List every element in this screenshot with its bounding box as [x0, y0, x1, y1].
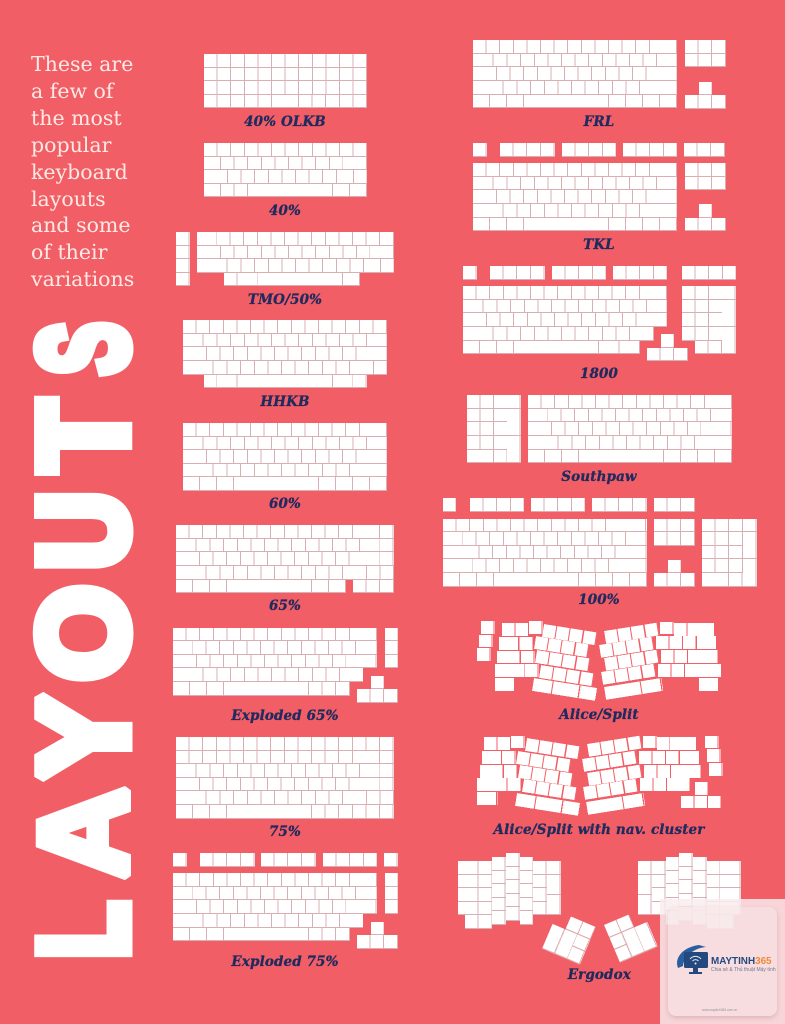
label: 40% OLKB: 40% OLKB [244, 114, 326, 130]
panel: Southpaw [467, 395, 732, 483]
keys: nav column [385, 873, 398, 914]
keys: right inner block [599, 622, 657, 702]
panel: 100% [443, 498, 756, 606]
keys: main block [173, 873, 377, 941]
title: LAYOUTS [30, 322, 138, 959]
keys: right inner block [582, 736, 640, 816]
logo tagline: Chia sẻ & Thủ thuật Máy tính [711, 967, 776, 973]
panel: Alice/Split with nav. cluster [477, 735, 722, 836]
intro text: layouts [31, 187, 106, 211]
label: Exploded 65%: Exploded 65% [231, 708, 339, 724]
intro text: and some [31, 213, 130, 237]
watermark overlay [660, 899, 785, 1024]
keys: numpad [702, 519, 757, 587]
keys: main block [463, 286, 667, 354]
label: Southpaw: Southpaw [561, 469, 637, 485]
intro text: keyboard [31, 160, 128, 184]
keys: arrow cluster [681, 782, 722, 809]
keys: function row [173, 853, 398, 867]
panel: Exploded 75% [173, 853, 398, 970]
keys: main block [173, 628, 377, 696]
intro text: variations [31, 267, 134, 291]
panel: 40% [204, 143, 367, 219]
panel: 40% OLKB [204, 54, 367, 130]
keys: HHKB [183, 320, 387, 388]
logo icon [675, 944, 709, 978]
label: FRL: FRL [584, 114, 614, 130]
label: Ergodox: Ergodox [568, 967, 631, 983]
keys: macro column [176, 232, 190, 286]
watermark card [668, 907, 777, 1016]
keys: arrow cluster [357, 676, 398, 703]
keys: left inner block [517, 738, 587, 813]
keys: numpad [467, 395, 521, 463]
keys: 40% [204, 143, 367, 197]
keys: arrow cluster [685, 82, 726, 109]
label: TKL: TKL [583, 237, 615, 253]
keys: left inner block [534, 624, 604, 699]
logo wordmark: MAYTINH365 [711, 956, 772, 967]
label: 1800: 1800 [580, 366, 618, 382]
logo url: www.maytinh365.com.vn [702, 1008, 737, 1012]
keys: main block [443, 519, 647, 587]
keys: 65% [176, 525, 394, 593]
keys: 75% [176, 737, 394, 819]
label: 65%: 65% [269, 598, 301, 614]
keys: main block [473, 163, 677, 231]
keys: right thumb cluster [604, 909, 658, 963]
label: TMO/50%: TMO/50% [248, 292, 322, 308]
intro text: These are [31, 52, 133, 76]
intro text: the most [31, 106, 122, 130]
panel: 65% [176, 525, 394, 614]
keys: nav cluster [685, 163, 726, 190]
keys: TMO main block [197, 232, 394, 286]
panel: Alice/Split [477, 621, 722, 721]
panel: Exploded 65% [173, 628, 398, 724]
keys: arrow cluster [685, 204, 726, 231]
keys: macro column [477, 621, 495, 662]
label: Alice/Split: Alice/Split [559, 707, 639, 723]
keys: right outer block [656, 621, 722, 692]
panel: TKL [473, 143, 726, 253]
intro text [30, 52, 134, 291]
keys: left outer block [477, 735, 525, 806]
keys: main block [473, 40, 677, 108]
intro text: of their [31, 240, 107, 264]
keys: 40% OLKB [204, 54, 367, 108]
label: Exploded 75%: Exploded 75% [231, 954, 339, 970]
label: 60%: 60% [269, 496, 301, 512]
label: 40%: 40% [269, 203, 301, 219]
intro text: a few of [31, 79, 113, 103]
panel: HHKB [183, 320, 387, 410]
keys: left outer block [495, 621, 543, 692]
intro text: popular [31, 133, 111, 157]
panel: 1800 [463, 266, 736, 382]
label: Alice/Split with nav. cluster: Alice/Split with nav. cluster [494, 822, 704, 838]
keys: function row [473, 143, 725, 157]
keys: left thumb cluster [542, 910, 596, 964]
panel: 75% [176, 737, 394, 840]
keys: main block [528, 395, 732, 463]
label: 75%: 75% [269, 824, 301, 840]
keys: right outer block [639, 735, 699, 806]
panel: Ergodox [458, 853, 741, 983]
keys: numpad [682, 286, 736, 354]
keys: arrow cluster [357, 922, 398, 949]
keys: right hand [638, 853, 741, 929]
label: 100%: 100% [578, 592, 620, 608]
label: HHKB: HHKB [260, 394, 310, 410]
panel: FRL [473, 40, 726, 130]
keys: nav cluster [654, 519, 695, 546]
keys: nav column [385, 628, 398, 668]
keys: nav cluster [685, 40, 726, 67]
keys: arrow cluster [654, 560, 695, 587]
keys: function row [463, 266, 736, 280]
keys: function row [443, 498, 695, 512]
keys: left hand [458, 853, 561, 929]
panel: 60% [183, 423, 387, 512]
panel: TMO/50% [176, 232, 394, 308]
keys: 60% [183, 423, 387, 491]
keys: arrow cluster [647, 334, 688, 361]
keys: nav column [705, 735, 723, 777]
